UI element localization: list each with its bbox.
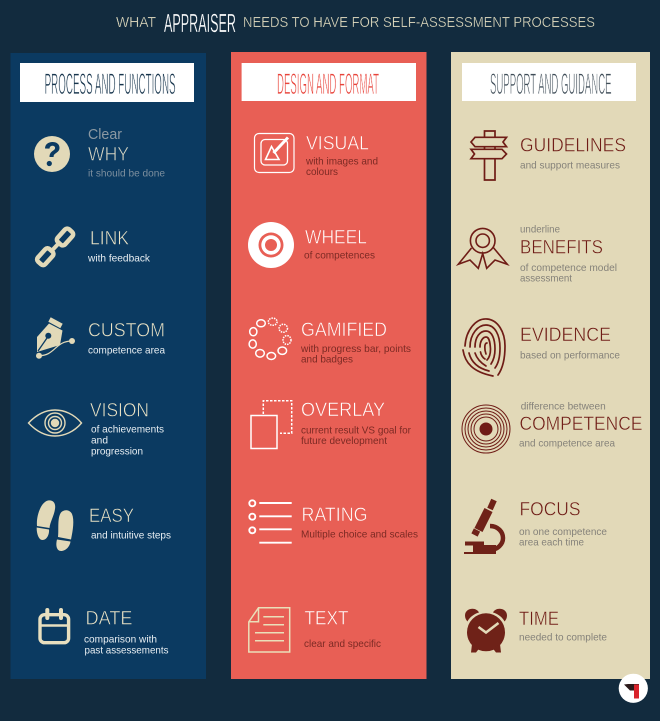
item: gamified bbox=[249, 318, 411, 365]
item: custom bbox=[36, 320, 165, 359]
text: overlay: OVERLAY bbox=[301, 399, 385, 421]
icon: calendar bbox=[40, 610, 69, 643]
icon: progress circles bbox=[249, 318, 291, 360]
text: focus: area each time bbox=[519, 537, 584, 549]
text: clear why bbox=[88, 126, 165, 180]
panel: design and format bbox=[231, 52, 426, 679]
title: APPRAISER bbox=[164, 8, 236, 38]
text: visual: colours bbox=[306, 166, 338, 178]
text: vision bbox=[90, 400, 164, 457]
infographic canvas: DESIGN AND FORMAT bbox=[277, 68, 379, 101]
icon: eye bbox=[28, 410, 82, 436]
text: focus bbox=[519, 499, 607, 549]
item: focus bbox=[464, 499, 607, 554]
text: overlay: future development bbox=[301, 435, 387, 447]
text: gamified bbox=[300, 319, 411, 365]
item: why bbox=[34, 126, 165, 180]
icon: chain link bbox=[36, 227, 74, 266]
item: benefits bbox=[458, 224, 617, 284]
item: vision bbox=[28, 400, 164, 457]
text: date: past assessements bbox=[84, 645, 168, 657]
text: visual: VISUAL bbox=[306, 132, 369, 154]
text: visual bbox=[305, 132, 378, 178]
icon: checklist bbox=[249, 500, 292, 543]
text: gamified: and badges bbox=[301, 353, 353, 365]
title bbox=[116, 8, 595, 38]
text: wheel bbox=[304, 226, 375, 262]
panel: support and guidance bbox=[451, 52, 650, 679]
text: evidence: EVIDENCE bbox=[520, 324, 611, 346]
icon: microscope bbox=[464, 500, 503, 554]
panel: process and functions bbox=[10, 53, 206, 679]
icon: overlapping sheets bbox=[251, 401, 292, 448]
text: text: clear and specific bbox=[304, 638, 381, 650]
icon: alarm clock bbox=[465, 609, 507, 652]
infographic canvas: PROCESS AND FUNCTIONS bbox=[45, 68, 176, 101]
text: rating bbox=[301, 504, 418, 540]
icon: document bbox=[249, 608, 290, 652]
icon: signpost bbox=[471, 131, 506, 180]
text: easy: EASY bbox=[89, 505, 134, 527]
item: visual bbox=[254, 132, 378, 178]
text: focus: on one competence bbox=[519, 526, 607, 538]
text: benefits: underline bbox=[520, 224, 560, 236]
text: rating: RATING bbox=[302, 504, 368, 526]
title: WHAT bbox=[116, 14, 156, 31]
icon: wheel bbox=[248, 222, 294, 268]
text: overlay: current result VS goal for bbox=[301, 424, 411, 436]
icon: concentric target bbox=[462, 405, 510, 453]
text: guidelines: GUIDELINES bbox=[520, 135, 626, 157]
icon: question mark bbox=[34, 136, 70, 172]
text: easy: and intuitive steps bbox=[91, 530, 171, 542]
item: easy bbox=[37, 500, 171, 551]
text: time: needed to complete bbox=[519, 631, 607, 643]
text: vision: and bbox=[91, 434, 108, 446]
logo badge bbox=[619, 674, 648, 703]
item: time bbox=[465, 608, 607, 652]
text: vision: of achievements bbox=[91, 423, 164, 435]
text: date bbox=[84, 608, 168, 657]
text: benefits bbox=[520, 224, 617, 284]
text: custom bbox=[88, 320, 165, 356]
item: evidence bbox=[463, 319, 620, 376]
text: clear why: it should be done bbox=[88, 168, 165, 180]
text: rating: Multiple choice and scales bbox=[301, 528, 418, 540]
item: text bbox=[249, 608, 381, 652]
text: date: comparison with bbox=[84, 634, 157, 646]
text: guidelines: and support measures bbox=[520, 159, 620, 171]
text: wheel: WHEEL bbox=[305, 226, 367, 248]
text: visual: with images and bbox=[305, 156, 378, 168]
text: custom: CUSTOM bbox=[88, 320, 165, 342]
text: link: with feedback bbox=[87, 253, 151, 265]
item: rating bbox=[249, 500, 418, 543]
text: competence: difference between bbox=[521, 400, 606, 412]
heading: process and functions bbox=[20, 63, 194, 102]
text: easy bbox=[89, 505, 171, 542]
text: competence bbox=[519, 400, 642, 450]
text: benefits: of competence model bbox=[520, 262, 617, 274]
icon: award rosette bbox=[458, 228, 507, 268]
icon: fingerprint bbox=[463, 319, 505, 376]
text: evidence bbox=[520, 324, 620, 361]
icon: footprints bbox=[37, 500, 73, 551]
item: guidelines bbox=[471, 131, 626, 180]
text: time: TIME bbox=[519, 608, 559, 630]
text: benefits: assessment bbox=[520, 272, 572, 284]
text: custom: competence area bbox=[88, 344, 165, 356]
text: gamified: with progress bar, points bbox=[300, 343, 411, 355]
item: competence bbox=[462, 400, 642, 453]
icon: pen nib bbox=[36, 320, 75, 359]
text: wheel: of competences bbox=[304, 250, 375, 262]
text: clear why: Clear bbox=[88, 126, 122, 143]
text: competence: COMPETENCE bbox=[520, 413, 642, 435]
text: link: LINK bbox=[90, 228, 129, 250]
text: overlay bbox=[301, 399, 411, 447]
text: link bbox=[87, 228, 151, 265]
text: focus: FOCUS bbox=[520, 499, 580, 521]
text: text bbox=[304, 608, 381, 650]
text: vision: VISION bbox=[90, 400, 149, 422]
icon: picture and pencil bbox=[254, 134, 294, 172]
text: gamified: GAMIFIED bbox=[301, 319, 387, 341]
text: vision: progression bbox=[91, 445, 143, 457]
text: competence: and competence area bbox=[519, 438, 615, 450]
text: clear why: WHY bbox=[88, 144, 129, 166]
heading: design and format bbox=[242, 63, 416, 101]
heading: support and guidance bbox=[462, 63, 636, 101]
text: guidelines bbox=[520, 135, 626, 171]
title: NEEDS TO HAVE FOR SELF-ASSESSMENT PROCESSES bbox=[243, 14, 595, 31]
item: date bbox=[40, 608, 168, 657]
text: text: TEXT bbox=[304, 608, 349, 630]
text: benefits: BENEFITS bbox=[520, 237, 603, 259]
text: evidence: based on performance bbox=[520, 349, 620, 361]
item: overlay bbox=[251, 399, 411, 448]
text: time bbox=[519, 608, 607, 643]
item: link bbox=[36, 227, 151, 266]
item: wheel bbox=[248, 222, 375, 268]
text: date: DATE bbox=[86, 608, 132, 630]
